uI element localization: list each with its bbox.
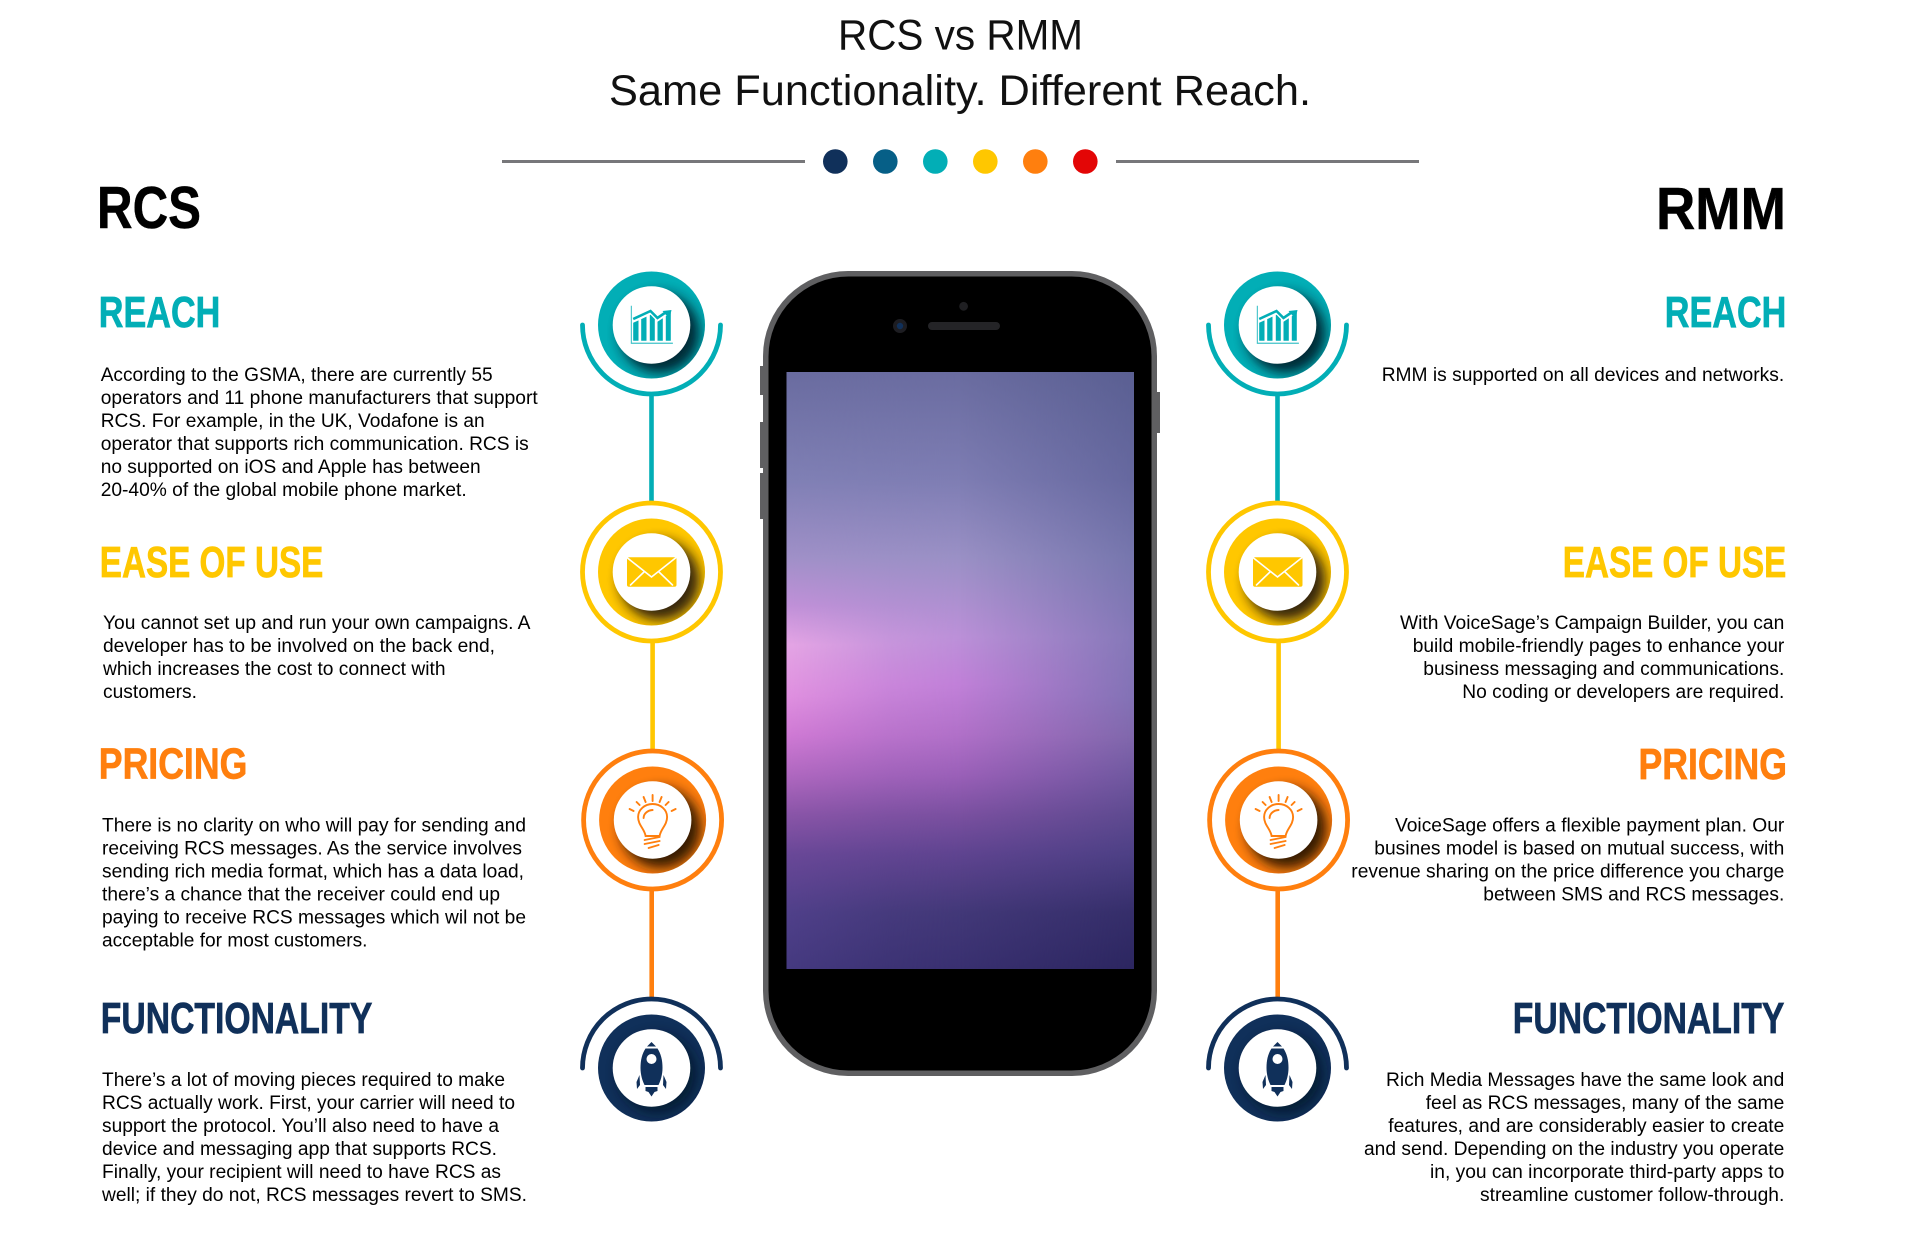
title: Same Functionality. Different Reach.: [609, 68, 1311, 115]
panel: RMM pricing: between SMS and RCS messages.: [1483, 884, 1784, 906]
title: RCS vs RMM: [838, 12, 1083, 60]
panel: RCS reach: [99, 288, 538, 501]
panel: RCS ease of use: EASE OF USE: [100, 538, 323, 587]
panel: RMM functionality: features, and are considerably easier to create: [1388, 1115, 1784, 1137]
panel: RCS ease of use: You cannot set up and run your own campaigns. A: [103, 612, 531, 634]
panel: RMM functionality: Rich Media Messages have the same look and: [1386, 1069, 1784, 1091]
icon: RCS ease of use envelope badge: [582, 503, 720, 641]
icon: RCS functionality rocket badge: [582, 999, 720, 1122]
panel: RMM pricing: revenue sharing on the price difference you charge: [1351, 860, 1784, 882]
panel: RCS pricing: [99, 740, 526, 952]
panel: RMM ease of use: [1400, 538, 1786, 703]
panel: RMM functionality: and send. Depending on the industry you operate: [1364, 1138, 1784, 1160]
panel: RMM ease of use: EASE OF USE: [1563, 538, 1786, 587]
panel: RCS reach: RCS. For example, in the UK, Vodafone is an: [101, 410, 485, 432]
panel: RMM pricing: [1351, 740, 1787, 906]
side buttons: [760, 366, 1160, 519]
heading: RMM: RMM: [1656, 176, 1786, 242]
panel: RMM ease of use: No coding or developers are required.: [1462, 681, 1784, 703]
panel: RCS functionality: [101, 994, 527, 1206]
panel: RMM functionality: in, you can incorporate third-party apps to: [1430, 1161, 1784, 1183]
panel: RMM ease of use: business messaging and communications.: [1423, 658, 1784, 680]
panel: RCS functionality: Finally, your recipient will need to have RCS as: [102, 1161, 501, 1183]
panel: RCS functionality: support the protocol. You’ll also need to have a: [102, 1115, 499, 1137]
panel: RMM functionality: [1364, 994, 1784, 1206]
panel: RCS pricing: paying to receive RCS messages which wil not be: [102, 906, 526, 928]
panel: RCS ease of use: which increases the cost to connect with: [102, 658, 446, 680]
speaker: [928, 322, 1000, 330]
panel: RCS reach: REACH: [99, 288, 220, 337]
timeline: RMM connectors: [1275, 394, 1281, 998]
icon: RMM functionality rocket badge: [1208, 999, 1346, 1122]
panel: RMM ease of use: With VoiceSage’s Campaign Builder, you can: [1400, 612, 1784, 634]
panel: RCS reach: no supported on iOS and Apple has between: [101, 456, 481, 478]
icon: RMM reach chart badge: [1208, 272, 1346, 394]
panel: RMM functionality: streamline customer follow-through.: [1480, 1184, 1784, 1206]
panel: RCS functionality: FUNCTIONALITY: [101, 994, 372, 1043]
panel: RCS pricing: receiving RCS messages. As the service involves: [102, 838, 522, 860]
panel: RMM pricing: PRICING: [1638, 740, 1787, 789]
panel: RCS pricing: there’s a chance that the receiver could end up: [102, 884, 500, 906]
icon: RMM pricing light bulb badge: [1210, 751, 1348, 889]
panel: RCS pricing: There is no clarity on who will pay for sending and: [102, 814, 526, 836]
timeline: RCS connectors: [649, 394, 655, 998]
panel: RMM functionality: feel as RCS messages, many of the same: [1426, 1092, 1784, 1114]
panel: RCS pricing: acceptable for most customers.: [102, 930, 368, 952]
panel: RCS functionality: device and messaging app that supports RCS.: [102, 1138, 497, 1160]
panel: RCS reach: operator that supports rich communication. RCS is: [101, 433, 529, 455]
panel: RMM pricing: busines model is based on mutual success, with: [1374, 838, 1784, 860]
divider with coloured dots: [502, 149, 1419, 174]
panel: RMM ease of use: build mobile-friendly pages to enhance your: [1413, 635, 1785, 657]
sensor dot: [959, 302, 968, 311]
panel: RCS functionality: well; if they do not, RCS messages revert to SMS.: [101, 1184, 527, 1206]
panel: RMM functionality: FUNCTIONALITY: [1513, 994, 1784, 1043]
panel: RCS functionality: RCS actually work. First, your carrier will need to: [102, 1092, 515, 1114]
panel: RCS pricing: sending rich media format, which has a data load,: [102, 860, 524, 882]
front camera: [893, 319, 907, 333]
panel: RCS ease of use: customers.: [103, 681, 197, 703]
panel: RMM reach: REACH: [1665, 288, 1786, 337]
phone screen: [786, 372, 1134, 969]
icon: RCS pricing light bulb badge: [584, 751, 722, 889]
title: [609, 12, 1311, 115]
phone body: [763, 271, 1157, 1076]
panel: RCS reach: According to the GSMA, there are currently 55: [101, 364, 493, 386]
panel: RMM reach: [1382, 288, 1786, 386]
phone: [760, 271, 1160, 1076]
panel: RCS pricing: PRICING: [99, 740, 247, 788]
panel: RMM reach: RMM is supported on all devices and networks.: [1382, 364, 1784, 386]
panel: RMM pricing: VoiceSage offers a flexible payment plan. Our: [1395, 814, 1785, 836]
panel: RCS reach: 20-40% of the global mobile phone market.: [101, 479, 467, 501]
icon: RMM ease of use envelope badge: [1208, 503, 1346, 641]
icon: RCS reach chart badge: [582, 272, 720, 394]
heading: RCS: RCS: [97, 175, 201, 241]
panel: RCS reach: operators and 11 phone manufacturers that support: [101, 387, 538, 409]
panel: RCS functionality: There’s a lot of moving pieces required to make: [102, 1069, 505, 1091]
panel: RCS ease of use: developer has to be involved on the back end,: [103, 635, 495, 657]
panel: RCS ease of use: [100, 538, 531, 703]
